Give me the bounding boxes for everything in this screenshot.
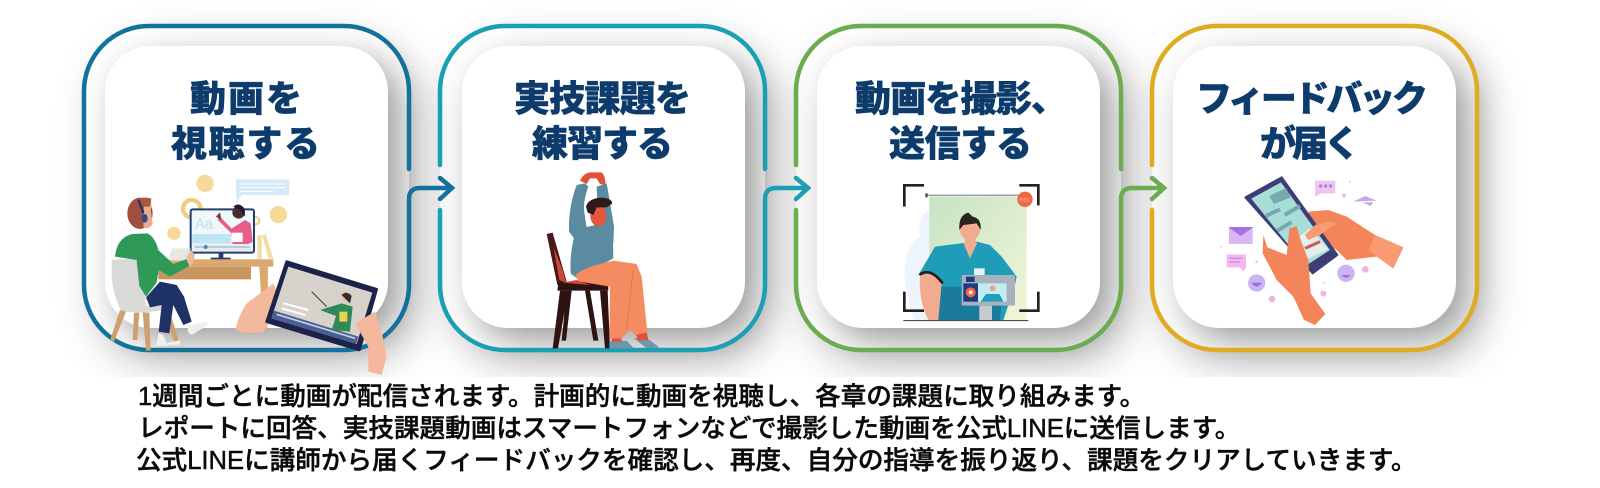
hands bbox=[580, 172, 605, 185]
illustration: seated stretch exercise bbox=[547, 172, 659, 348]
line 1: 1週間ごとに動画が配信されます。計画的に動画を視聴し、各章の課題に取り組みます。 bbox=[138, 382, 1145, 411]
teacher on screen bbox=[216, 205, 253, 244]
desk bbox=[158, 259, 273, 331]
seated man bbox=[115, 198, 208, 346]
phone bbox=[1245, 177, 1337, 273]
floor line bbox=[903, 319, 1028, 322]
line 3: 公式LINEに講師から届くフィードバックを確認し、再度、自分の指導を振り返り、課題をクリアしていきます。 bbox=[136, 446, 1417, 475]
near hand bbox=[1263, 226, 1325, 325]
backdrop bbox=[925, 193, 1027, 320]
torso and arms bbox=[569, 183, 614, 278]
paper on desk bbox=[168, 248, 191, 261]
man bbox=[919, 213, 1017, 320]
frame corners bbox=[904, 185, 1038, 311]
monitor: Aa bbox=[195, 216, 214, 232]
chair bbox=[547, 233, 610, 348]
heading: step 2: 練習する bbox=[532, 123, 673, 164]
pale blob bbox=[904, 210, 930, 320]
heading: step 3: 動画を撮影、 bbox=[855, 78, 1067, 119]
chair bbox=[110, 258, 179, 351]
speech bubble bbox=[236, 179, 289, 203]
heading: step 1: 動画を bbox=[190, 78, 302, 119]
line 2: レポートに回答、実技課題動画はスマートフォンなどで撮影した動画を公式LINEに送信します。 bbox=[138, 414, 1240, 443]
far hand bbox=[1308, 210, 1403, 268]
head bbox=[586, 198, 612, 226]
REC badge: REC bbox=[1020, 197, 1031, 203]
monitor bbox=[191, 209, 254, 260]
purple decorations bbox=[1220, 181, 1377, 302]
heading: step 1: 視聴する bbox=[171, 123, 320, 164]
heading: step 4: が届く bbox=[1260, 123, 1360, 164]
heading: step 2: 実技課題を bbox=[514, 78, 691, 119]
panel 4 outline bbox=[1152, 26, 1477, 350]
icon circles and gear bbox=[167, 175, 287, 240]
panel 2 outline with arrow bbox=[440, 26, 808, 350]
panel 1 outline with arrow bbox=[84, 26, 452, 350]
illustration: filming with camera bbox=[903, 185, 1038, 321]
camera bbox=[962, 268, 1015, 320]
heading: step 4: フィードバック bbox=[1196, 78, 1428, 119]
illustration: watching video at desk with tablet bbox=[110, 175, 387, 375]
heading: step 3: 送信する bbox=[889, 123, 1032, 164]
shoes bbox=[609, 332, 659, 348]
panel 3 outline with arrow bbox=[796, 26, 1164, 350]
illustration: phone held in hands with messages bbox=[1220, 177, 1403, 325]
description text bbox=[136, 382, 1417, 475]
legs bbox=[575, 261, 647, 338]
soft shadow background behind the panels bbox=[75, 22, 1508, 377]
tablet with hands bbox=[236, 262, 387, 375]
books bbox=[257, 235, 273, 259]
